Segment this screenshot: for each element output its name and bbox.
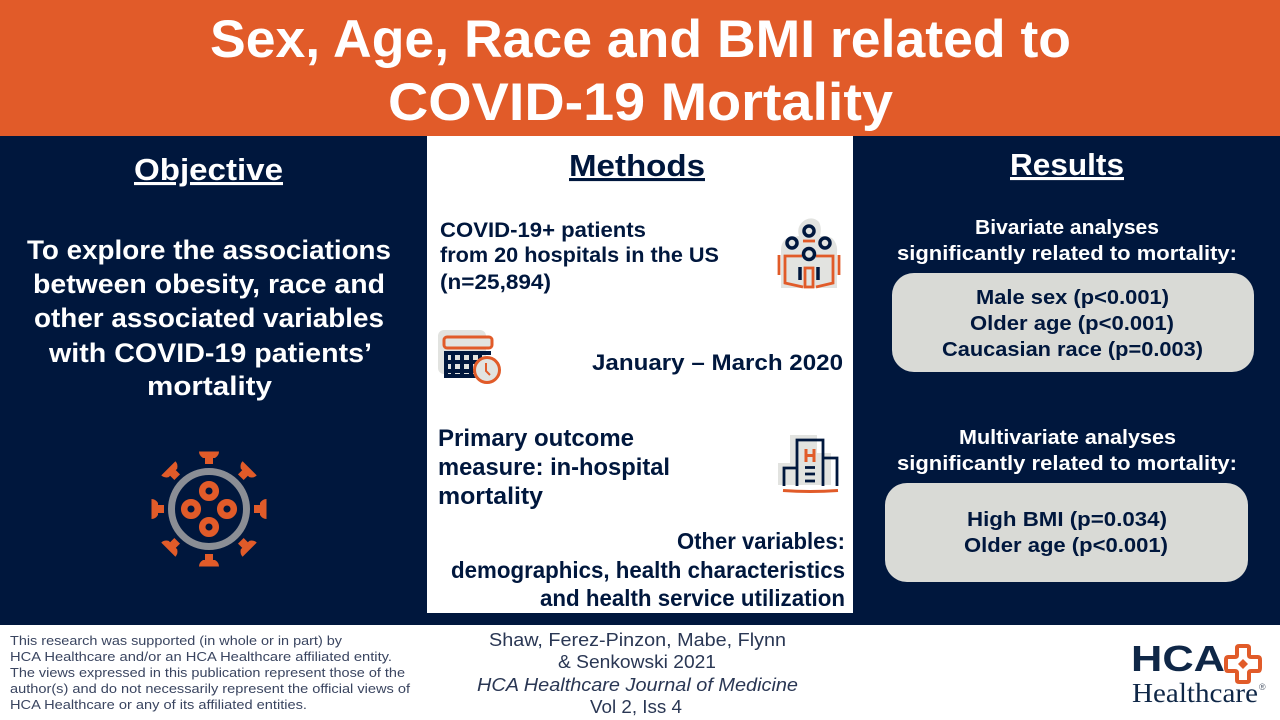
icon: hospital — [778, 435, 838, 492]
title: COVID-19 Mortality — [388, 73, 894, 132]
title: Sex, Age, Race and BMI related to — [210, 10, 1071, 69]
date range text: January – March 2020 — [592, 350, 843, 375]
funding disclaimer — [10, 633, 410, 712]
bivariate results box: Older age (p<0.001) — [970, 312, 1174, 335]
patients text: COVID-19+ patients — [440, 219, 646, 242]
title — [210, 10, 1071, 132]
results heading: Results — [1010, 147, 1124, 182]
primary outcome text — [438, 425, 670, 510]
objective text: mortality — [147, 371, 272, 401]
header banner — [0, 0, 1280, 136]
objective text: To explore the associations — [27, 235, 391, 265]
citation: Shaw, Ferez-Pinzon, Mabe, Flynn — [489, 630, 786, 650]
patients text: from 20 hospitals in the US — [440, 244, 719, 267]
logo: HCA Healthcare — [1131, 638, 1266, 708]
objective text: other associated variables — [34, 303, 384, 333]
logo: HCA Healthcare: Healthcare — [1132, 678, 1258, 708]
other variables text — [451, 528, 845, 611]
bivariate heading — [897, 217, 1237, 265]
logo: HCA Healthcare: HCA — [1131, 638, 1225, 679]
other variables text: and health service utilization — [540, 585, 845, 611]
other variables text: demographics, health characteristics — [451, 557, 845, 583]
bivariate heading: significantly related to mortality: — [897, 243, 1237, 265]
primary outcome text: mortality — [438, 483, 544, 510]
citation: & Senkowski 2021 — [558, 652, 716, 672]
funding disclaimer: HCA Healthcare or any of its affiliated entities. — [10, 697, 307, 712]
other variables text: Other variables: — [677, 528, 845, 554]
primary outcome text: Primary outcome — [438, 425, 634, 452]
funding disclaimer: This research was supported (in whole or in part) by — [10, 633, 343, 648]
funding disclaimer: HCA Healthcare and/or an HCA Healthcare affiliated entity. — [10, 649, 392, 664]
multivariate heading: Multivariate analyses — [959, 427, 1176, 449]
objective text: with COVID-19 patients’ — [48, 338, 372, 368]
objective text: between obesity, race and — [33, 269, 385, 299]
citation — [477, 630, 798, 717]
icon: patients group — [779, 218, 839, 288]
multivariate heading: significantly related to mortality: — [897, 453, 1237, 475]
methods heading: Methods — [569, 148, 705, 183]
panel: results — [853, 136, 1280, 625]
funding disclaimer: The views expressed in this publication represent those of the — [10, 665, 405, 680]
panel: objective — [0, 136, 427, 625]
citation: HCA Healthcare Journal of Medicine — [477, 675, 798, 695]
patients text — [440, 219, 719, 294]
multivariate results box — [885, 483, 1248, 582]
bivariate results box: Caucasian race (p=0.003) — [942, 338, 1203, 361]
funding disclaimer: author(s) and do not necessarily represent the official views of — [10, 681, 410, 696]
patients text: (n=25,894) — [440, 271, 551, 294]
bivariate heading: Bivariate analyses — [975, 217, 1159, 239]
date range icon — [438, 330, 500, 382]
multivariate results box: High BMI (p=0.034) — [967, 508, 1167, 531]
multivariate heading — [897, 427, 1237, 475]
logo: HCA Healthcare: ® — [1259, 682, 1266, 692]
bivariate results box — [892, 273, 1254, 372]
bivariate results box: Male sex (p<0.001) — [976, 286, 1169, 309]
icon: virus — [152, 452, 266, 566]
panel: methods — [427, 136, 853, 613]
primary outcome text: measure: in-hospital — [438, 454, 670, 481]
citation: Vol 2, Iss 4 — [590, 697, 682, 717]
multivariate results box: Older age (p<0.001) — [964, 534, 1168, 557]
objective heading: Objective — [134, 152, 283, 187]
objective text — [27, 235, 391, 401]
